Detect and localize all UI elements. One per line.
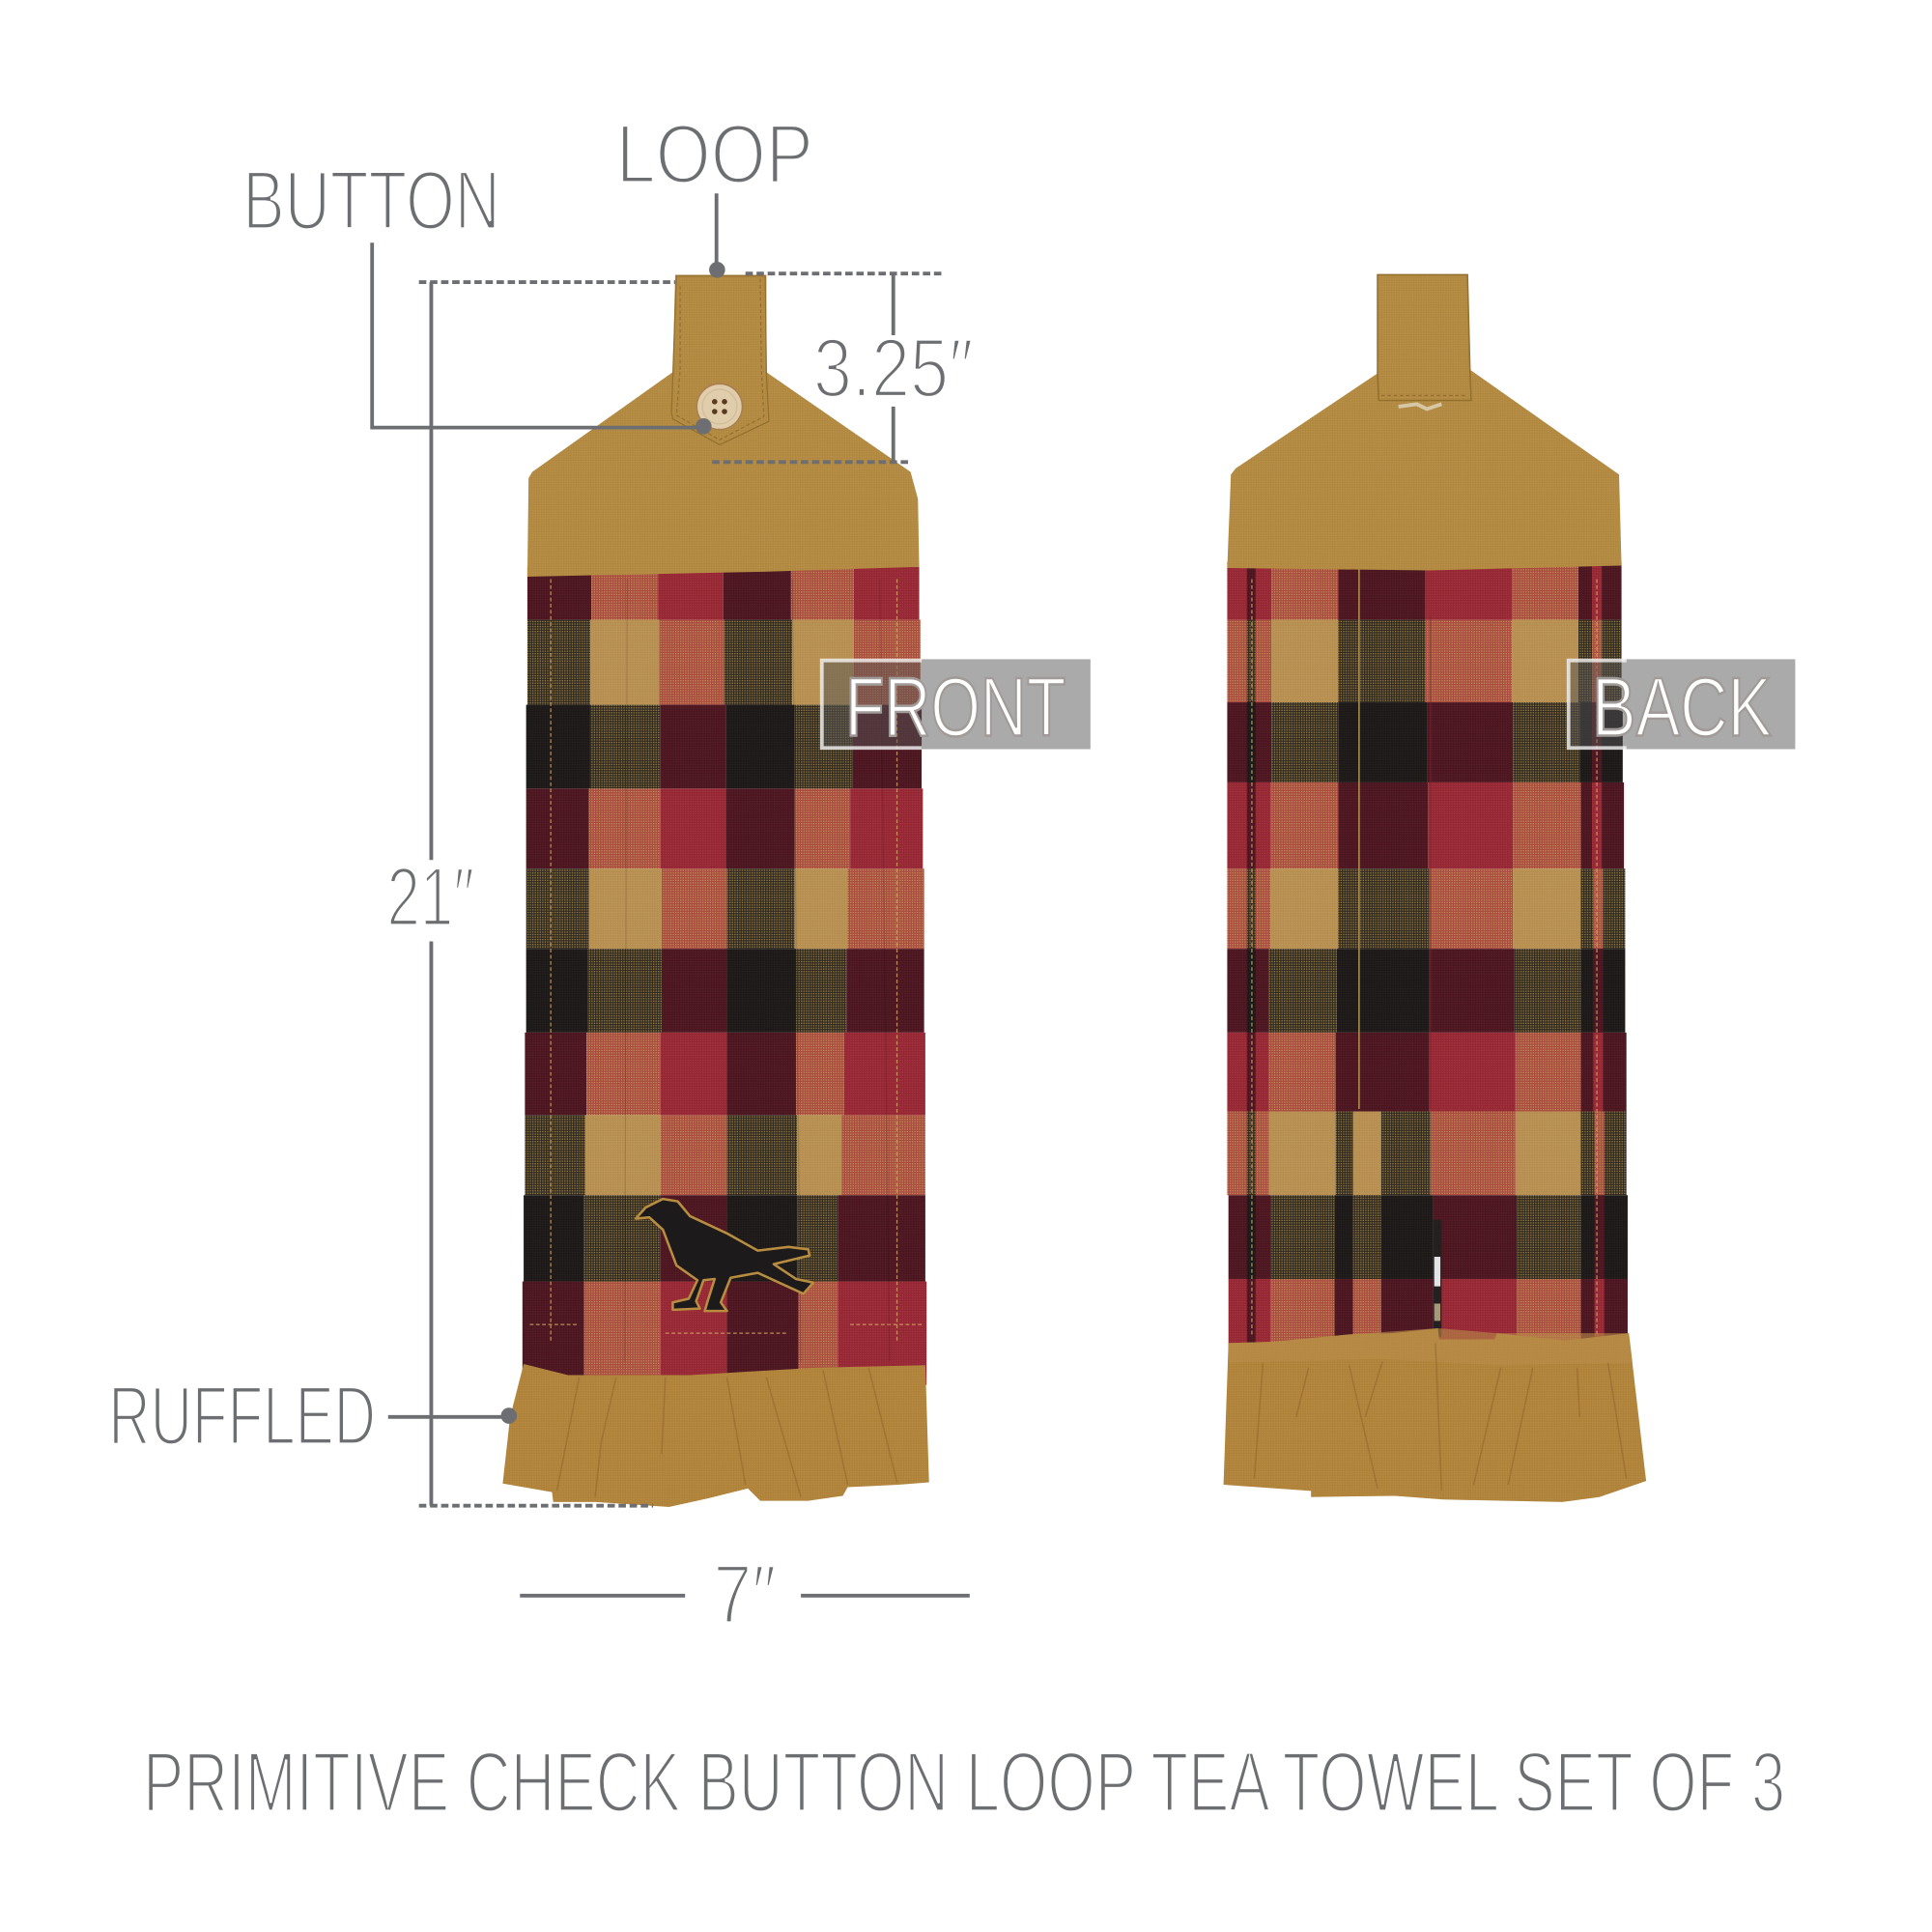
label: RUFFLED with leader: RUFFLED [108, 1369, 376, 1463]
back towel [1224, 274, 1646, 1502]
label: LOOP with leader [616, 107, 813, 278]
callout: FRONT tag: FRONT [845, 660, 1065, 753]
back khaki header with loop tab [1227, 274, 1622, 571]
callout: BACK tag: BACK [1592, 660, 1772, 753]
front plaid body [523, 567, 926, 1385]
label: BUTTON with leader: BUTTON [242, 154, 500, 247]
label: BUTTON with leader [242, 154, 712, 435]
front ruffle [502, 1364, 929, 1507]
label: LOOP with leader: LOOP [616, 107, 813, 201]
dimension: 21 inch length: 21″ [387, 850, 474, 944]
dimension: 7 inch width: 7″ [714, 1548, 777, 1641]
loose threads [1399, 404, 1441, 409]
back plaid body [1227, 562, 1628, 1355]
back center seam gap [1433, 1220, 1441, 1337]
dimension: 3.25 inch loop height: 3.25″ [813, 322, 974, 415]
front towel [502, 274, 929, 1507]
front khaki header with loop tab [527, 274, 920, 577]
icon: wooden button [696, 384, 742, 430]
back ruffle [1224, 1328, 1646, 1502]
back vertical stripes [1247, 562, 1605, 1350]
icon: crow appliqué [636, 1199, 813, 1311]
